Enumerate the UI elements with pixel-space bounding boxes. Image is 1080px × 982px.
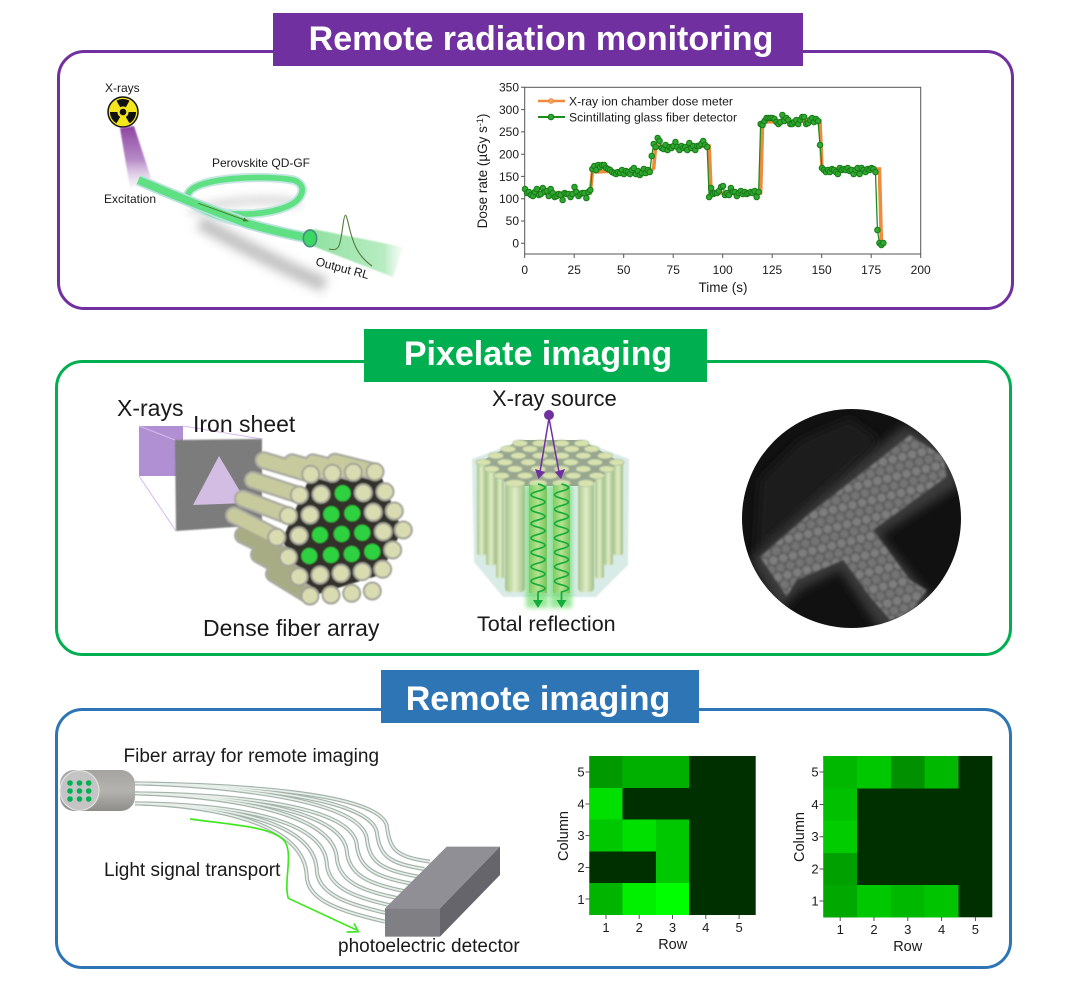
heatmap: left pattern [556,756,756,953]
main fiber [138,180,317,247]
X-ray source square [139,426,183,476]
y axis tick labels: 250 [499,125,519,139]
x tick labels [837,922,979,937]
label: Light signal transport: Light signal transport [104,860,281,881]
x axis tick labels: 0 [521,263,528,277]
y tick labels: 5 [811,764,819,780]
label: Excitation: Excitation [104,192,156,206]
green arrow heads [533,600,566,608]
series: ion chamber dose meter [525,121,883,243]
heading: Pixelate imaging: Pixelate imaging [404,335,672,373]
heatmap cells [589,756,689,915]
y axis tick labels: 100 [499,192,519,206]
x tick labels: 3 [669,920,676,935]
light transport arrow [190,819,358,932]
y tick labels: 1 [577,892,585,907]
x tick labels: 4 [938,922,945,937]
fiber bodies [234,460,375,596]
x tick labels: 4 [702,920,709,935]
panel: remote imaging [56,670,1010,968]
label: Iron sheet: Iron sheet [193,411,296,437]
fiber tops [476,440,624,487]
y axis tick labels: 200 [499,148,519,162]
y axis tick labels: 0 [512,236,519,250]
label: photoelectric detector: photoelectric detector [338,936,520,957]
y axis tick labels: 50 [506,214,519,228]
label: X-ray source: X-ray source [492,386,617,411]
axis ticks [820,772,975,921]
fiber ends: cream [268,463,412,604]
y tick labels: 4 [577,796,585,812]
y tick labels [577,764,585,907]
x tick labels: 3 [904,922,911,937]
heatmap: right pattern [792,756,992,955]
iron sheet [175,439,262,531]
x axis tick labels: 200 [911,263,931,277]
output pulse curve [329,215,372,266]
y tick labels: 2 [811,862,819,876]
x axis tick labels: 125 [762,263,783,277]
axis title: Column: Column [556,811,572,861]
y axis title: Dose rate (µGy s [475,126,490,228]
lit fibers with glow [526,486,572,608]
x axis tick labels [521,263,931,277]
x axis tick labels: 50 [617,263,631,277]
axis title: Column: Column [792,812,808,862]
fiber shadow [190,200,325,285]
X-ray excitation beam [120,126,151,188]
y axis tick labels: 350 [499,80,519,94]
axis title: Row: Row [893,939,923,955]
plot frame and ticks [521,87,921,258]
x tick labels: 2 [870,922,878,937]
cladding block [472,441,629,597]
y tick labels [811,764,819,908]
label: Output RL: Output RL [314,254,371,282]
fiber loop [188,178,302,223]
label: Fiber array for remote imaging: Fiber array for remote imaging [124,746,379,767]
diagram: perovskite QD glass fiber [104,81,403,285]
heading: Pixelate imaging [364,329,707,382]
x tick labels: 5 [735,920,743,935]
top surface [480,440,620,486]
y axis title: -1 [475,118,485,126]
x tick labels: 1 [837,922,844,937]
x tick labels: 1 [602,920,610,935]
legend: Scintillating glass fiber detector [569,110,737,124]
fiber array connector head [60,770,135,811]
label: Total reflection: Total reflection [477,612,616,636]
y tick labels: 3 [811,829,819,844]
label: X-rays: X-rays [105,81,140,95]
imaging result: fiber array micrograph [742,409,961,630]
icon: radiation source [108,97,138,127]
series: scintillating glass fiber detector [525,115,883,245]
line chart: dose rate over time [475,80,931,295]
label: Dense fiber array: Dense fiber array [203,615,380,641]
legend: X-ray ion chamber dose meter [569,94,733,108]
axis ticks [586,772,739,919]
x tick labels [602,920,743,935]
heading: Remote radiation monitoring: Remote radiation monitoring [309,20,773,58]
x axis tick labels: 25 [568,263,581,277]
X-ray projection lines [139,426,262,531]
diagram: fiber array to detector [60,746,520,957]
y axis tick labels: 150 [499,170,519,184]
x axis tick labels: 150 [812,263,832,277]
heading: Remote imaging: Remote imaging [406,680,670,718]
output light beam [310,229,403,277]
label: X-rays: X-rays [117,395,183,421]
panel: remote radiation monitoring [58,13,1012,308]
y axis title: ) [475,114,490,118]
x tick labels: 2 [636,920,643,935]
heading: Remote radiation monitoring [273,13,803,66]
diagram: total reflection in fibers [472,386,629,636]
y tick labels: 5 [577,764,585,780]
side cylinders [477,462,623,592]
x axis tick labels: 75 [667,263,680,277]
y tick labels: 2 [577,860,585,875]
fiber ends: lit green [301,485,380,564]
y axis tick labels: 300 [499,103,519,117]
fiber bundle [234,460,412,604]
y tick labels: 3 [577,828,585,843]
x axis tick labels: 175 [861,263,882,277]
y tick labels: 4 [811,797,819,812]
panel: pixelate imaging [56,329,1010,654]
photoelectric detector block [385,847,500,937]
heading: Remote imaging [381,670,699,723]
heatmap cells [823,756,958,917]
x axis title: Time (s) [698,280,748,295]
label: Perovskite QD-GF: Perovskite QD-GF [212,156,310,170]
y axis tick labels [499,80,519,250]
total reflection zigzag arrows [531,484,568,600]
fiber strands [135,783,430,922]
x axis tick labels: 100 [713,263,733,277]
axis title: Row: Row [658,937,688,953]
x tick labels: 5 [972,922,979,937]
triangular aperture [193,456,247,505]
legend [538,94,737,124]
y tick labels: 1 [811,894,819,908]
diagram: iron sheet and dense fiber array [117,395,412,641]
X-ray source dot and rays [535,410,565,479]
